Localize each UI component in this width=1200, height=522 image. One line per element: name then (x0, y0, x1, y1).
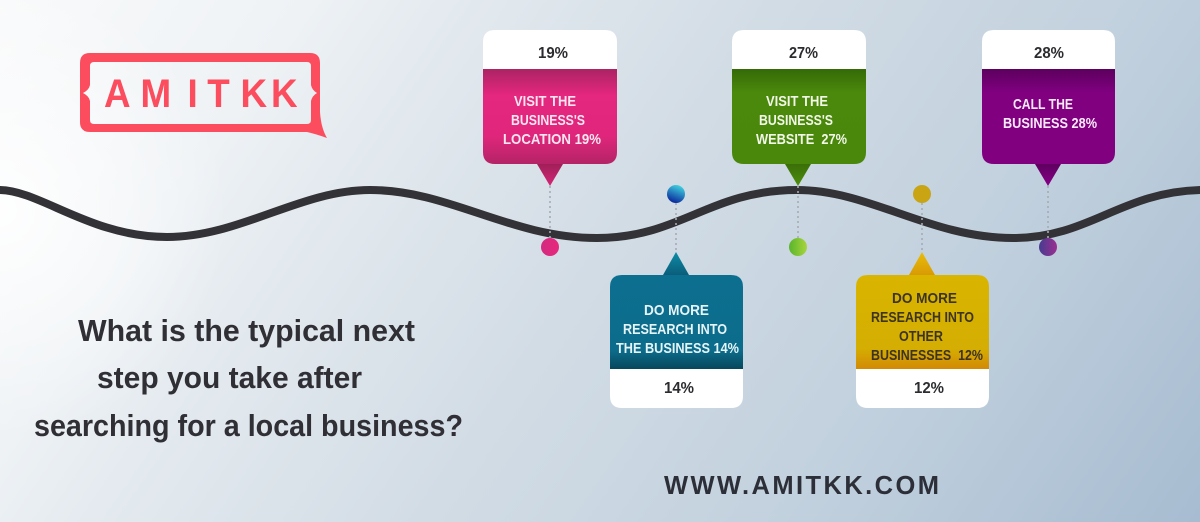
step: call the business 28%: 28% (1034, 45, 1064, 62)
heading question (34, 313, 463, 443)
step: visit the business's website 27%: VISIT THE (766, 93, 828, 110)
step: visit the business's website 27%: BUSINESS'S (759, 112, 833, 129)
timeline wave (0, 190, 1200, 238)
step: call the business 28%: BUSINESS 28% (1003, 115, 1097, 132)
step: do more research into other businesses 12%: OTHER (899, 328, 943, 345)
step: visit the business's website 27%: 27% (789, 45, 818, 62)
step: call the business 28% (982, 30, 1115, 256)
logo: AMITKK speech bubble (80, 53, 327, 138)
step: do more research into the business 14%: RESEARCH INTO (623, 321, 727, 338)
step: visit the business's location 19%: VISIT THE (514, 93, 576, 110)
step: visit the business's website 27% (732, 30, 866, 256)
logo: AMITKK speech bubble: AMITKK (104, 72, 298, 116)
step: visit the business's location 19%: 19% (538, 45, 568, 62)
step: visit the business's location 19% (483, 30, 617, 256)
step: do more research into the business 14% (610, 185, 743, 408)
heading question: searching for a local business? (34, 408, 463, 443)
step: do more research into other businesses 12%: DO MORE (892, 290, 957, 307)
step: visit the business's location 19%: LOCATION 19% (503, 131, 601, 148)
step: do more research into other businesses 12%: RESEARCH INTO (871, 309, 974, 326)
step: visit the business's location 19%: BUSINESS'S (511, 112, 585, 129)
website url: WWW.AMITKK.COM (664, 472, 939, 500)
step: do more research into the business 14%: DO MORE (644, 302, 709, 319)
step: visit the business's website 27%: WEBSITE 27% (756, 131, 847, 148)
step: do more research into other businesses 12%: BUSINESSES 12% (871, 347, 983, 364)
step: call the business 28%: CALL THE (1013, 96, 1073, 113)
step: do more research into other businesses 12% (856, 185, 989, 408)
heading question: step you take after (97, 360, 362, 395)
step: do more research into the business 14%: THE BUSINESS 14% (616, 340, 739, 357)
heading question: What is the typical next (78, 313, 415, 348)
step: do more research into the business 14%: 14% (664, 380, 694, 397)
step: do more research into other businesses 12%: 12% (914, 380, 944, 397)
